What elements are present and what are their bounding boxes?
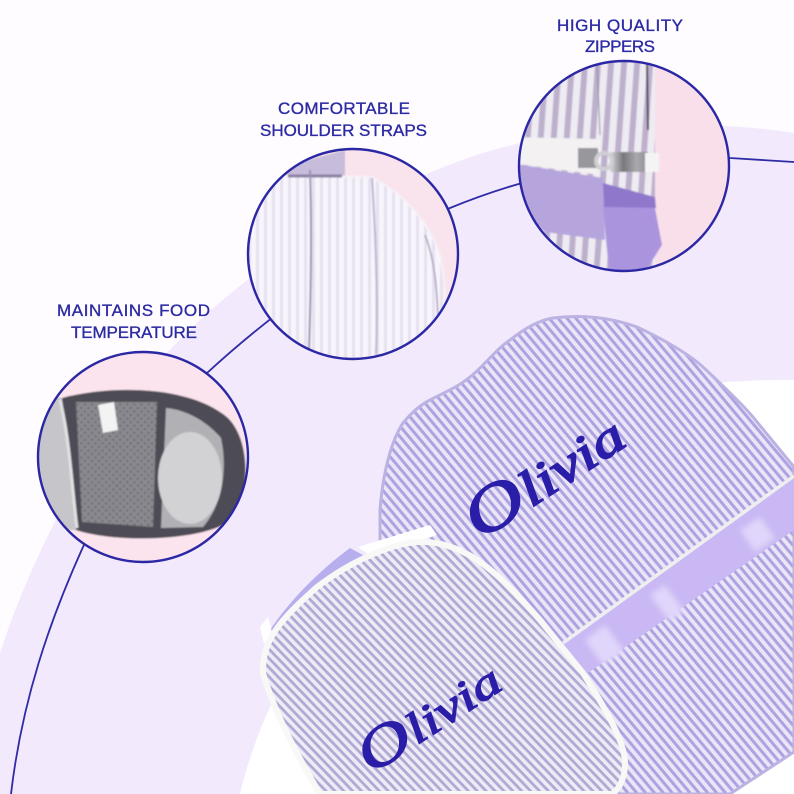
circle outline [248,149,458,359]
zipper pull [610,152,648,172]
lunch box body [263,542,625,794]
ribbon highlights [585,517,775,665]
zipper tape [522,136,597,175]
grosgrain band [520,164,606,240]
circle outline [519,61,729,271]
lunch box lavender side [270,548,372,640]
backpack zipper [563,476,794,643]
backpack body [380,316,794,794]
backpack [380,316,794,794]
panel: comfortable shoulder straps [240,99,466,366]
heading: TEMPERATURE [71,323,197,342]
embroidered name: Olivia [344,647,512,786]
photo: strap detail [249,150,457,358]
backpack front ribbon [563,478,794,675]
mesh pocket [603,206,662,270]
heading: HIGH QUALITY [557,16,683,35]
connector line [11,156,794,794]
circle outline [38,352,248,562]
heading: COMFORTABLE [278,99,410,118]
panel: maintains food temperature [30,301,256,571]
lunch box [260,525,625,794]
white inner area [240,380,794,794]
photo: bag interior [39,353,246,560]
panel: high quality zippers [518,19,730,272]
embroidered name: Olivia [449,396,637,553]
heading: ZIPPERS [585,37,655,56]
heading: SHOULDER STRAPS [260,121,427,140]
heading [557,16,683,56]
heading [57,301,210,342]
heading: MAINTAINS FOOD [57,301,210,320]
lunch box side tab [260,617,272,644]
heading [260,99,427,140]
photo: zipper detail [520,62,728,270]
lunch box top strap [358,525,437,557]
